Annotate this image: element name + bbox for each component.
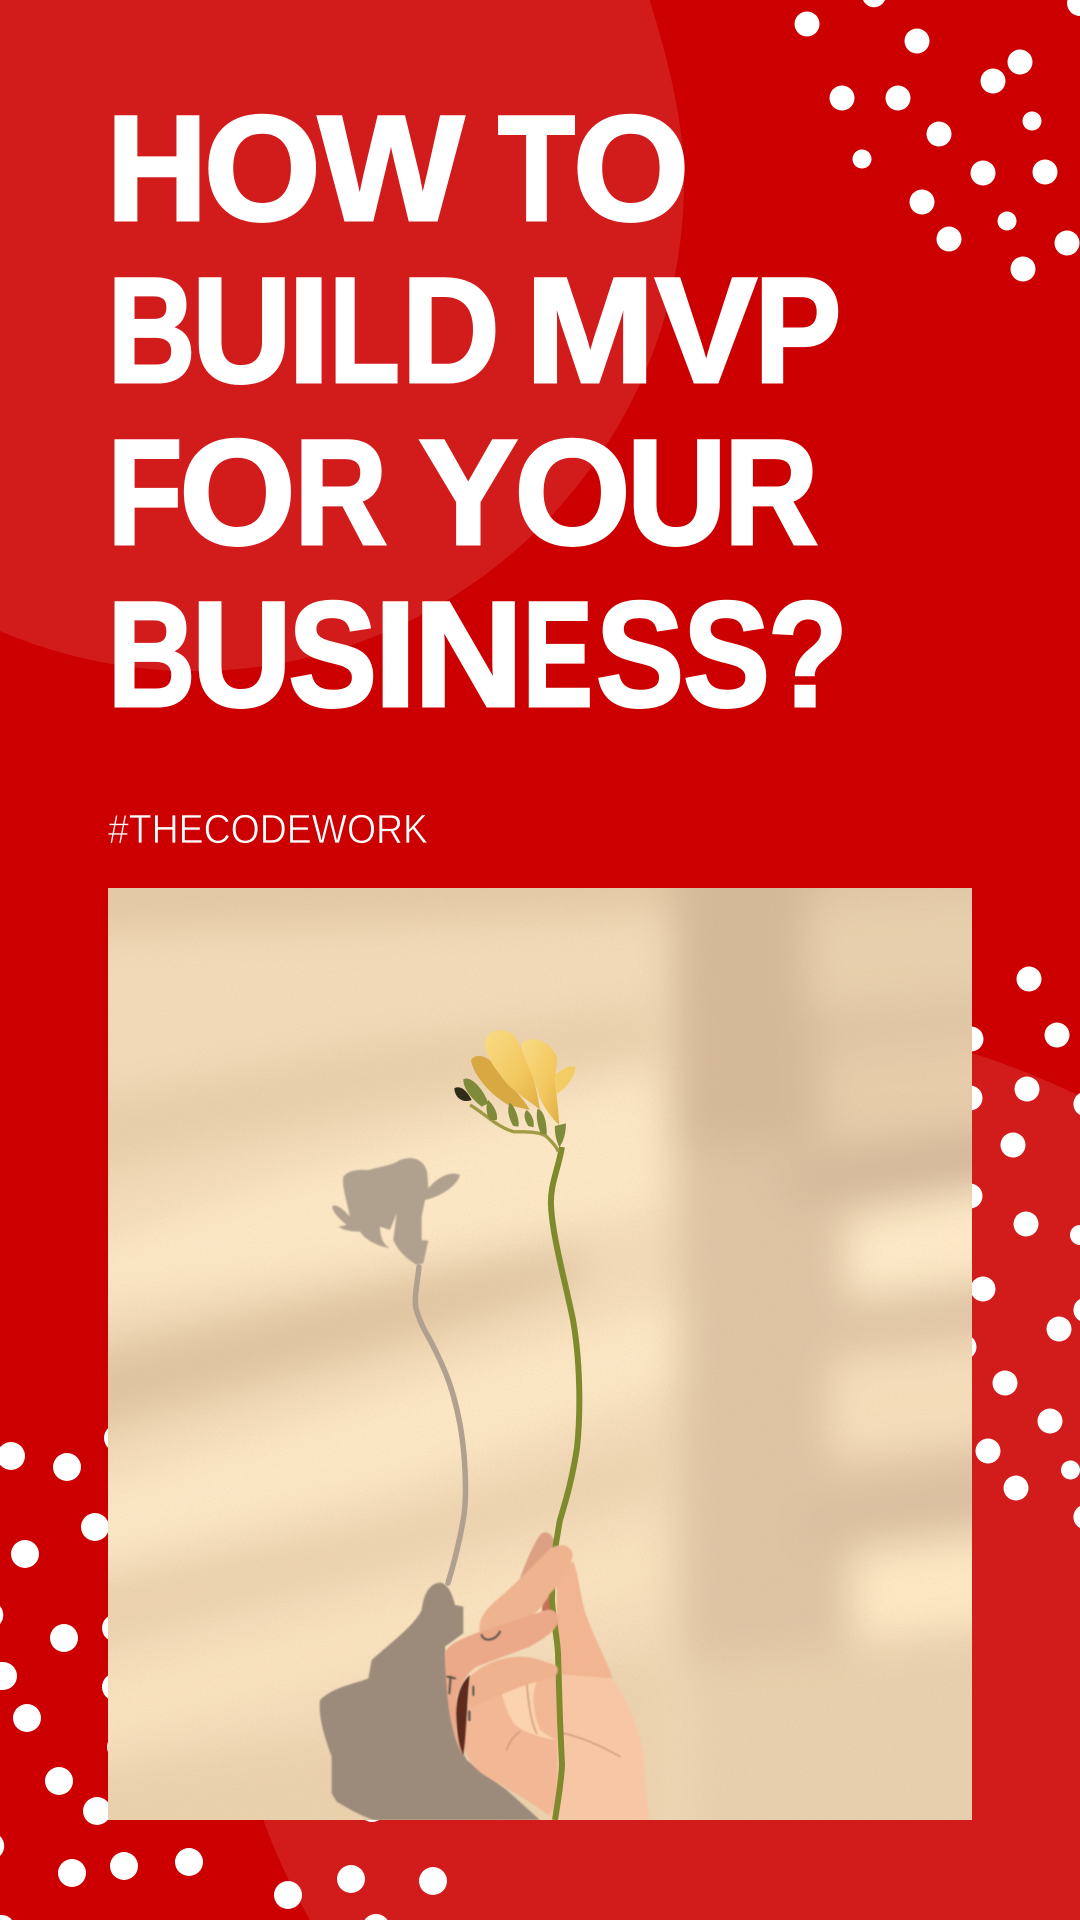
title line 1: O (204, 84, 321, 252)
title line 3: O (514, 408, 631, 576)
flower head (454, 1030, 575, 1152)
wall plaster texture (108, 887, 972, 1820)
title line 2: I (287, 246, 330, 414)
title line 2: D (402, 246, 500, 414)
lower finger (468, 1657, 558, 1707)
top finger (479, 1545, 573, 1632)
lower petal (471, 1056, 530, 1110)
title line 2: U (192, 246, 292, 414)
wall base (108, 888, 714, 1820)
wall (108, 888, 972, 1820)
cast shadow: stem (415, 1267, 466, 1583)
title line 3: O (179, 408, 296, 576)
title line 3: R (294, 408, 387, 576)
small back petal (555, 1066, 575, 1094)
title line 4: S (288, 570, 377, 738)
title line 2: P (754, 246, 841, 414)
title line 1: W (318, 84, 464, 252)
inner hand (463, 1672, 557, 1815)
dots: right side (952, 966, 1080, 1528)
title line 2: V (655, 246, 757, 414)
title line 1: T (498, 84, 575, 252)
title line 4: U (192, 570, 292, 738)
title line 3: R (724, 408, 818, 576)
title line 1: H (106, 84, 207, 252)
title line 3: U (627, 408, 727, 576)
wall light and shadow bands (108, 888, 972, 1820)
dots: top right (794, 0, 1080, 282)
title line 4: S (596, 570, 684, 738)
palm creases (507, 1683, 620, 1757)
title line 4: B (108, 570, 196, 738)
decorative circle: bottom right (229, 1029, 1080, 1920)
title line 4: E (523, 570, 593, 738)
middle finger with tattoo (445, 1610, 558, 1755)
branch (470, 1105, 558, 1152)
cast shadow: flower head (332, 1158, 460, 1265)
dots: bottom left (0, 1424, 447, 1920)
title line 2: M (525, 246, 655, 414)
title (106, 84, 848, 738)
stem (551, 1147, 579, 1820)
tattoos (447, 1632, 500, 1720)
palm highlight (502, 1682, 555, 1740)
title line 2: L (329, 246, 400, 414)
title line 3: Y (418, 408, 518, 576)
back finger (520, 1532, 554, 1578)
title line 3: F (108, 408, 182, 576)
cast shadow: hand (320, 1583, 540, 1820)
title line 4: N (414, 570, 524, 738)
title line 2: B (108, 246, 196, 414)
green buds (463, 1078, 566, 1147)
title line 1: O (573, 84, 689, 252)
dark bud (454, 1087, 472, 1101)
gap behind stem (541, 1594, 550, 1612)
hand, front fingers (445, 1545, 573, 1755)
title line 4: S (683, 570, 770, 738)
right petal (522, 1039, 559, 1125)
main petal (485, 1030, 540, 1110)
title line 4: I (374, 570, 417, 738)
photo: flower held in hand against a sunlit wall (108, 888, 972, 1820)
hashtag: #THECODEWORK (108, 806, 428, 852)
dark fold between fingers (456, 1675, 470, 1755)
decorative circle: top left (0, 0, 684, 671)
title line 4: ? (768, 570, 848, 738)
thumb (557, 1562, 613, 1678)
palm (549, 1674, 649, 1820)
hand, back layers (463, 1532, 649, 1820)
